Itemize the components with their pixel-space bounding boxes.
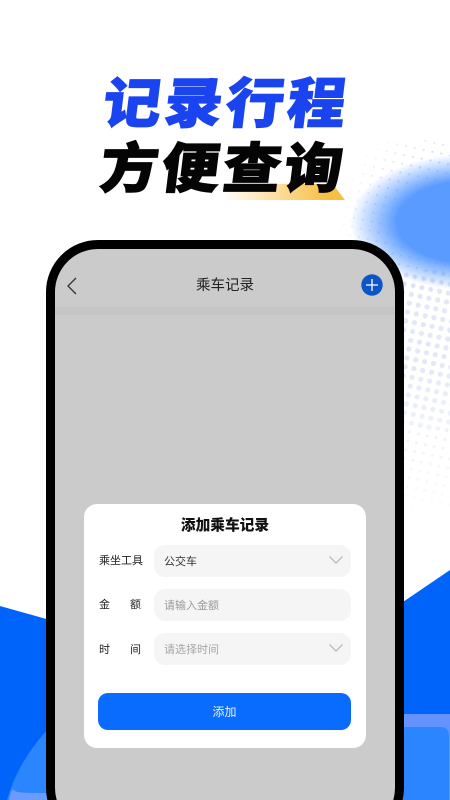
dialog title: 添加乘车记录: [181, 518, 269, 534]
icon: back chevron: [67, 278, 76, 294]
left blue shape: [0, 606, 50, 800]
vehicle value: 公交车: [164, 556, 197, 568]
left lighter arc: [7, 727, 50, 800]
right blue shape: [400, 570, 450, 800]
field: vehicle: [154, 545, 351, 577]
label: amount: 金: [99, 599, 110, 611]
icon: dropdown chevron: [329, 644, 343, 652]
header divider band: [55, 307, 395, 315]
field: time: [154, 633, 351, 665]
add button: 添加: [212, 705, 236, 719]
label: vehicle: 乘坐工具: [99, 555, 143, 567]
label: time: 时: [99, 644, 110, 656]
add button: [98, 693, 351, 730]
icon: dropdown chevron: [329, 556, 343, 564]
label: amount: [99, 598, 141, 611]
phone frame: [46, 240, 404, 800]
label: time: 间: [130, 644, 141, 656]
blue glow: [350, 154, 450, 290]
dots field: [344, 140, 450, 480]
icon: add button: [361, 274, 383, 296]
label: time: [99, 644, 141, 656]
screen title: 乘车记录: [196, 278, 254, 294]
gold title underline: [222, 184, 345, 200]
amount placeholder: 请输入金额: [164, 600, 219, 612]
title line 2: 方便查询: [97, 139, 350, 200]
right lighter card: [400, 727, 449, 800]
field: amount: [154, 589, 351, 621]
right lighter band: [400, 714, 450, 800]
dialog card: [84, 504, 366, 748]
time placeholder: 请选择时间: [164, 644, 219, 656]
label: amount: 额: [130, 599, 141, 611]
left lower strip: [9, 789, 50, 800]
title line 1: 记录行程: [100, 74, 353, 135]
